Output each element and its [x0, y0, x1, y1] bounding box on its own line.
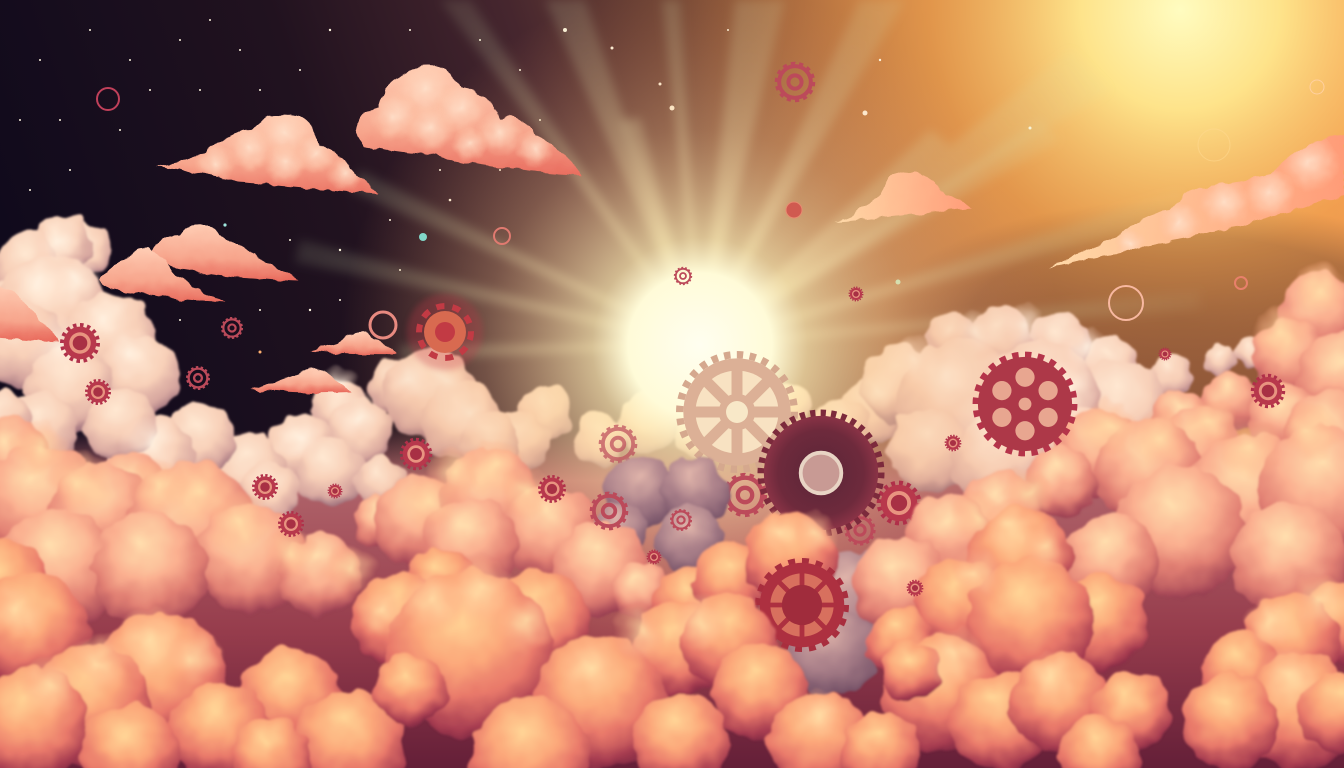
cloud: left lower	[100, 248, 225, 303]
gear: small under dark gear	[846, 516, 874, 544]
far cream clouds	[0, 215, 1264, 522]
cloud: long right	[1050, 130, 1344, 270]
floating sky clouds	[0, 60, 1344, 394]
cloud: small right of centre	[835, 172, 972, 221]
gear: small red behind dark gear	[725, 475, 765, 515]
near foreground clouds	[0, 540, 1344, 768]
cloud: top centre	[356, 64, 582, 176]
gear: small right	[879, 483, 919, 523]
base behind clouds	[0, 430, 1344, 768]
cloud: top left	[156, 114, 378, 194]
cloud: tiny lower left	[250, 369, 352, 394]
mid gears behind clouds	[600, 355, 919, 544]
small gears	[62, 64, 1284, 596]
gear: red wheel right	[976, 355, 1074, 453]
cloud: left upper	[150, 224, 298, 281]
bubbles	[97, 80, 1324, 338]
gear: dark large	[761, 413, 881, 533]
sun rays	[295, 0, 1200, 360]
gear: pale large	[680, 355, 794, 469]
large gear: lower centre	[758, 561, 846, 649]
cloud: left edge	[0, 285, 60, 342]
gear: pale small	[600, 426, 636, 462]
mid clouds	[0, 262, 1344, 696]
cloud: tiny left	[310, 332, 396, 354]
stars	[19, 19, 1032, 354]
gear: sunburst left	[407, 294, 483, 370]
